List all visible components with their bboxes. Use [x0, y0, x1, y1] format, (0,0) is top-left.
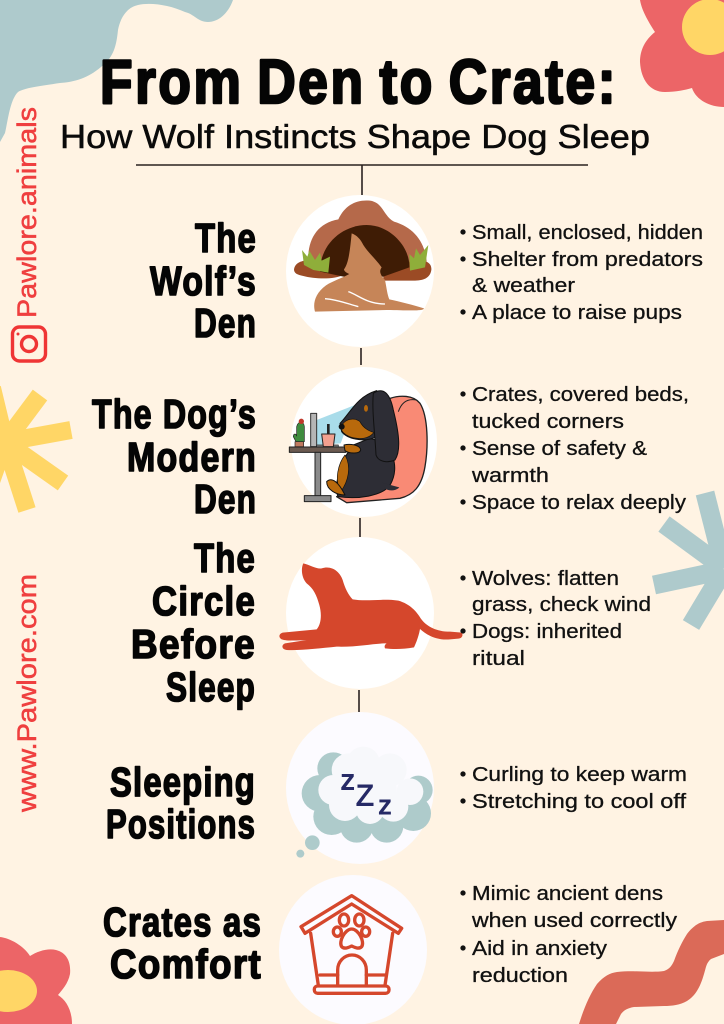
heading: Crates as Comfort: Crates as — [103, 899, 262, 945]
icon: sleep thought cloud: z — [378, 790, 392, 820]
icon: sleep thought cloud: z — [341, 764, 355, 796]
text block: sleeping positions bullets — [460, 764, 687, 813]
text block: wolf den bullets — [460, 222, 703, 324]
heading: Sleeping Positions: Sleeping — [110, 759, 256, 805]
text block: crates bullets: Mimic ancient dens — [472, 883, 663, 905]
decorative asterisk: left — [0, 388, 71, 510]
heading: Sleeping Positions — [106, 759, 256, 847]
text block: modern den bullets: Space to relax deeply — [472, 492, 686, 514]
heading: The Dog's Modern Den: Modern — [127, 434, 257, 480]
icon: dog at desk in chair — [289, 367, 437, 517]
heading: The Dog's Modern Den: Den — [194, 476, 257, 522]
text block: circling bullets: ritual — [472, 648, 525, 670]
heading: The Dog's Modern Den — [92, 391, 257, 522]
timeline connectors — [359, 165, 362, 712]
text block: circling bullets: Dogs: inherited — [472, 621, 622, 643]
text block: wolf den bullets: A place to raise pups — [472, 302, 682, 324]
heading: Sleeping Positions: Positions — [106, 801, 256, 847]
text block: wolf den bullets: Small, enclosed, hidden — [472, 222, 703, 244]
side text: instagram handle: Pawlore.animals — [12, 107, 42, 318]
heading: The Circle Before Sleep: Before — [131, 621, 256, 667]
heading: The Wolf's Den: Wolf’s — [150, 258, 257, 304]
decorative flower: top right — [640, 0, 724, 107]
side text: website: www.Pawlore.com — [12, 574, 42, 813]
text block: wolf den bullets: & weather — [472, 275, 575, 297]
text block: modern den bullets: Crates, covered beds, — [472, 384, 689, 406]
heading: The Wolf's Den: Den — [194, 300, 257, 346]
heading: Crates as Comfort: Comfort — [110, 941, 262, 987]
heading: Crates as Comfort — [103, 899, 262, 987]
text block: wolf den bullets: Shelter from predators — [472, 249, 703, 271]
icon: sleep thought cloud: Z — [356, 779, 374, 812]
icon: dog house — [279, 875, 427, 1024]
title divider — [136, 164, 588, 166]
text block: circling bullets — [460, 568, 651, 670]
text block: crates bullets: Aid in anxiety — [472, 938, 607, 960]
heading: The Circle Before Sleep: Sleep — [166, 664, 256, 710]
heading: The Circle Before Sleep: Circle — [152, 578, 256, 624]
decorative flower: bottom left — [0, 937, 72, 1024]
heading: The Circle Before Sleep — [131, 535, 256, 710]
text block: modern den bullets: warmth — [471, 465, 549, 487]
decorative blob: top left — [0, 0, 233, 142]
text block: crates bullets: when used correctly — [471, 910, 677, 932]
heading: The Wolf's Den — [150, 215, 257, 346]
text block: crates bullets: reduction — [472, 965, 568, 987]
heading: The Wolf's Den: The — [195, 215, 257, 261]
heading: The Dog's Modern Den: The Dog’s — [92, 391, 257, 437]
icon: instagram — [12, 327, 46, 361]
text block: sleeping positions bullets: Curling to keep warm — [472, 764, 687, 786]
text block: sleeping positions bullets: Stretching to cool off — [472, 791, 687, 813]
text block: modern den bullets: tucked corners — [472, 411, 624, 433]
subtitle: How Wolf Instincts Shape Dog Sleep — [60, 118, 650, 155]
title: From Den to Crate: — [100, 48, 618, 117]
text block: modern den bullets — [460, 384, 689, 514]
icon: sleep thought cloud — [286, 712, 434, 864]
text block: crates bullets — [460, 883, 677, 987]
heading: The Circle Before Sleep: The — [194, 535, 256, 581]
icon: wolf at den — [286, 195, 434, 347]
text block: circling bullets: Wolves: flatten — [472, 568, 619, 590]
icon: dog silhouette — [279, 537, 462, 689]
text block: circling bullets: grass, check wind — [472, 594, 651, 616]
decorative asterisk: right — [654, 493, 724, 625]
text block: modern den bullets: Sense of safety & — [472, 438, 648, 460]
decorative wave: bottom right — [579, 920, 724, 1024]
